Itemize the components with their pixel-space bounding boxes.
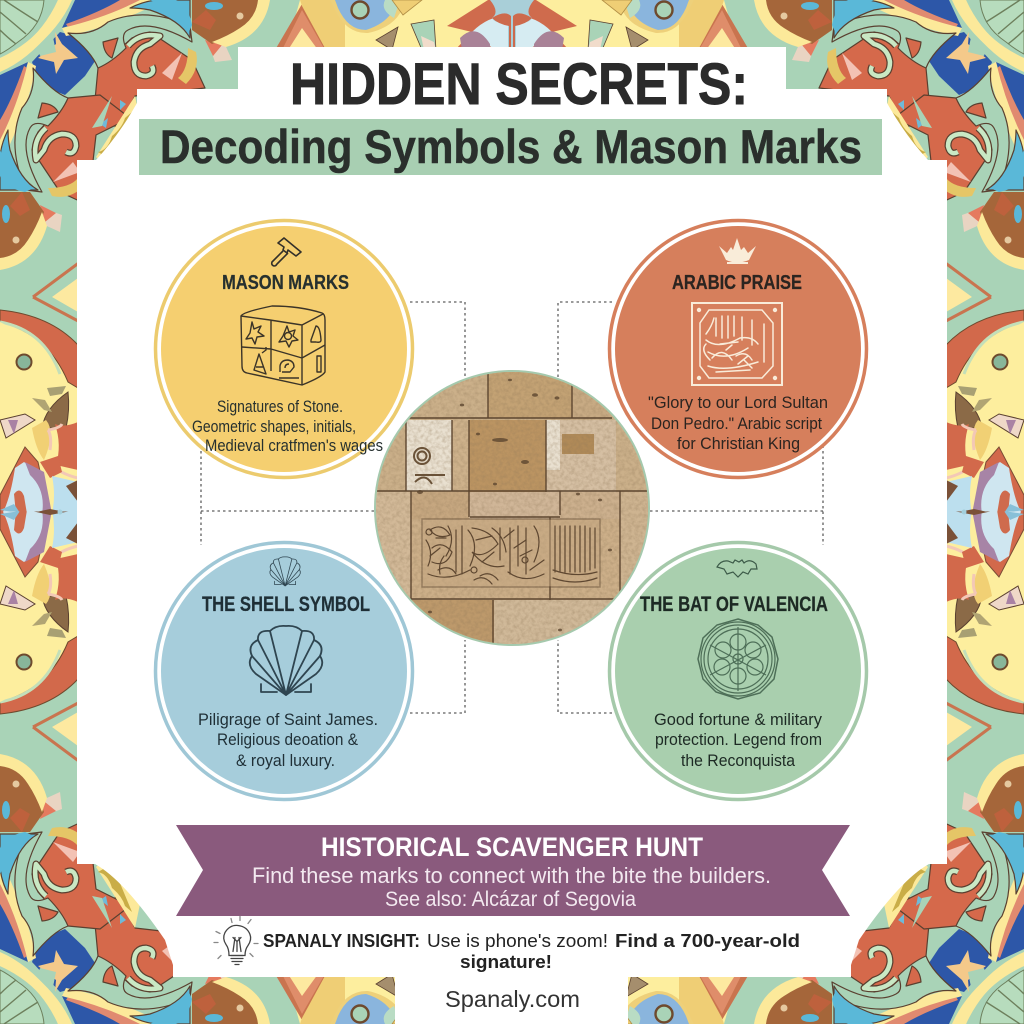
- body text: mason marks: Geometric shapes, initials,: [192, 417, 356, 436]
- banner: historical scavenger hunt: HISTORICAL SCAVENGER HUNT: [321, 832, 703, 862]
- body text: arabic praise: for Christian King: [677, 434, 800, 453]
- heading: the bat of valencia: THE BAT OF VALENCIA: [640, 593, 828, 616]
- body text: mason marks: Signatures of Stone.: [217, 397, 343, 416]
- callout: spanaly insight: SPANALY INSIGHT:: [263, 930, 420, 951]
- body text: mason marks: [192, 397, 383, 455]
- icon: small shell: [270, 557, 300, 586]
- subtitle band: Decoding Symbols & Mason Marks: [160, 120, 862, 173]
- panel: the shell symbol: [156, 542, 412, 800]
- body text: the bat of valencia: Good fortune & military: [654, 710, 822, 729]
- body text: the shell symbol: [198, 710, 378, 770]
- panel: the bat of valencia: [610, 542, 866, 800]
- body text: arabic praise: [648, 393, 828, 453]
- footer: website: Spanaly.com: [445, 986, 580, 1012]
- body text: the bat of valencia: [654, 710, 822, 770]
- banner: historical scavenger hunt: Find these marks to connect with the bite the builders.: [252, 863, 771, 888]
- icon: scallop shell: [250, 626, 322, 695]
- banner: historical scavenger hunt: [176, 825, 850, 916]
- callout: spanaly insight: Find a 700-year-old: [615, 930, 800, 951]
- callout: spanaly insight: Use is phone's zoom!: [427, 930, 608, 951]
- icon: geometric medallion: [698, 619, 778, 699]
- title: HIDDEN SECRETS:: [290, 52, 748, 117]
- body text: mason marks: Medieval cratfmen's wages: [205, 436, 383, 455]
- icon: crown: [719, 238, 756, 264]
- body text: the bat of valencia: the Reconquista: [681, 751, 795, 770]
- central photo: carved stone wall: [370, 366, 654, 650]
- panel: mason marks: [156, 220, 412, 478]
- heading: the shell symbol: THE SHELL SYMBOL: [202, 593, 370, 616]
- body text: the shell symbol: Religious deoation &: [217, 730, 359, 749]
- icon: bat: [717, 560, 757, 577]
- body text: the bat of valencia: protection. Legend from: [655, 730, 822, 749]
- panel: arabic praise: [610, 220, 866, 478]
- body text: arabic praise: Don Pedro." Arabic script: [651, 414, 822, 433]
- heading: mason marks: MASON MARKS: [222, 272, 349, 294]
- heading: arabic praise: ARABIC PRAISE: [672, 272, 802, 294]
- icon: hammer: [272, 238, 301, 266]
- body text: the shell symbol: Piligrage of Saint James.: [198, 710, 378, 729]
- callout: spanaly insight: signature!: [460, 951, 552, 972]
- callout: spanaly insight: [263, 930, 800, 972]
- banner: historical scavenger hunt: See also: Alcázar of Segovia: [385, 888, 636, 911]
- icon: light bulb: [214, 916, 258, 964]
- icon: carved stone cube: [241, 306, 325, 385]
- dotted connector lines: [201, 302, 823, 713]
- body text: the shell symbol: & royal luxury.: [236, 751, 335, 770]
- icon: calligraphy plaque: [692, 303, 782, 385]
- body text: arabic praise: "Glory to our Lord Sultan: [648, 393, 828, 412]
